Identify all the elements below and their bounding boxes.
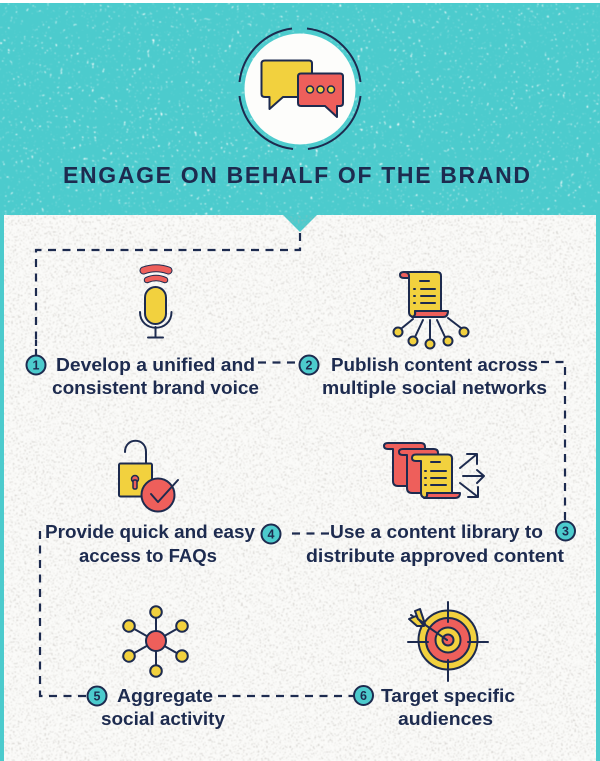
- step text: [52, 355, 259, 398]
- number badge 5: 5: [94, 690, 101, 704]
- step text: Publish content across: [331, 355, 538, 375]
- number badge 6: 6: [360, 689, 367, 703]
- step 5: [88, 606, 225, 729]
- number badge 1: 1: [33, 358, 40, 372]
- step text: [306, 522, 564, 566]
- step text: access to FAQs: [79, 546, 217, 566]
- icon: hub and spoke network: [123, 606, 188, 677]
- number badge 4: 4: [268, 528, 275, 542]
- icon: scroll with network: [394, 272, 468, 348]
- step 3: [306, 443, 575, 566]
- number badge 1: [26, 356, 46, 374]
- step text: consistent brand voice: [52, 378, 259, 398]
- number badge 3: 3: [562, 524, 569, 538]
- panel: steps background: [4, 215, 596, 761]
- step text: Provide quick and easy: [45, 522, 255, 542]
- step text: social activity: [101, 709, 225, 729]
- icon: open padlock with check: [119, 441, 178, 512]
- step text: [381, 686, 515, 729]
- number badge 4: [262, 524, 280, 544]
- step text: [45, 522, 255, 566]
- step 1: [26, 268, 259, 398]
- icon: content library scrolls with arrows: [384, 443, 484, 498]
- dashed connector path: [36, 233, 565, 696]
- step text: Develop a unified and: [56, 355, 255, 375]
- step text: distribute approved content: [306, 546, 564, 566]
- step 4: [45, 441, 280, 566]
- step text: Target specific: [381, 686, 515, 706]
- step text: audiences: [398, 709, 493, 729]
- step text: Aggregate: [117, 686, 213, 706]
- icon: target with arrow: [408, 602, 488, 681]
- number badge 3: [556, 522, 575, 540]
- title: ENGAGE ON BEHALF OF THE BRAND: [63, 162, 530, 188]
- step 2: [300, 272, 547, 398]
- step text: multiple social networks: [322, 378, 547, 398]
- number badge 6: [354, 686, 373, 705]
- step text: Use a content library to: [330, 522, 543, 542]
- icon: microphone: [140, 268, 172, 338]
- icon: speech bubbles in circle: [240, 28, 360, 149]
- step 6: [354, 602, 515, 729]
- step text: [101, 686, 225, 729]
- number badge 2: [300, 356, 318, 374]
- step text: [322, 355, 547, 398]
- number badge 2: 2: [306, 358, 313, 372]
